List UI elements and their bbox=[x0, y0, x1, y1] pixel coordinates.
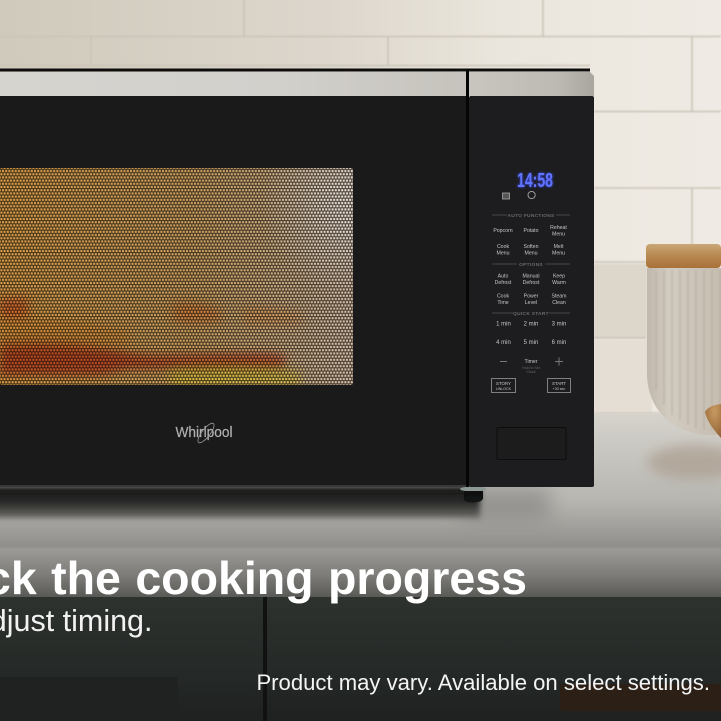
section: options: Defrost bbox=[495, 280, 512, 286]
timer controls: Clock bbox=[526, 370, 536, 374]
timer controls bbox=[500, 358, 563, 374]
section: options: Defrost bbox=[523, 280, 540, 286]
button: story unlock: UNLOCK bbox=[496, 387, 512, 391]
digital clock display: 14:58 bbox=[517, 169, 553, 192]
section: options: Auto bbox=[498, 274, 508, 280]
section: options: Steam bbox=[552, 294, 566, 300]
microwave shadow on counter bbox=[0, 486, 550, 518]
section: auto functions: Menu bbox=[497, 250, 510, 256]
section: quick start bbox=[492, 311, 570, 346]
section: auto functions: Reheat bbox=[550, 225, 567, 231]
section: auto functions: Popcorn bbox=[493, 228, 513, 234]
icon: sensor bbox=[502, 193, 510, 199]
section: quick start: 1 min bbox=[496, 322, 511, 328]
button: story unlock: STORY bbox=[496, 381, 511, 386]
cabinet below counter bbox=[0, 597, 721, 721]
digital clock display bbox=[517, 169, 553, 192]
button: story unlock bbox=[492, 378, 516, 392]
microwave foot bbox=[460, 486, 486, 502]
section: quick start: 5 min bbox=[524, 340, 538, 346]
countertop bbox=[0, 414, 721, 598]
storage jar bbox=[646, 244, 721, 435]
section: options: Cook bbox=[497, 294, 509, 300]
section: auto functions bbox=[492, 213, 570, 256]
door window with food visible bbox=[0, 168, 353, 386]
icon: timer bbox=[528, 191, 535, 199]
steel top trim: door bbox=[0, 72, 466, 96]
button: start bbox=[548, 378, 570, 392]
timer controls: Timer bbox=[524, 359, 538, 365]
section: options bbox=[492, 262, 570, 306]
section: auto functions: Potato bbox=[524, 228, 539, 234]
button: start: START bbox=[552, 381, 566, 386]
section: options: Manual bbox=[522, 274, 540, 280]
button: start: +30 sec bbox=[553, 387, 566, 391]
timer controls: Hold to Set bbox=[522, 366, 540, 370]
section: options: Power bbox=[524, 294, 539, 300]
section: options: Warm bbox=[552, 280, 566, 286]
section: auto functions: Menu bbox=[525, 250, 538, 256]
section: quick start: 3 min bbox=[552, 322, 566, 328]
section: quick start: 4 min bbox=[496, 340, 511, 346]
tiled wall bbox=[0, 0, 721, 430]
section: quick start: QUICK START bbox=[513, 311, 549, 317]
section: auto functions: Soften bbox=[524, 244, 539, 250]
section: options: OPTIONS bbox=[519, 262, 543, 268]
section: auto functions: Menu bbox=[552, 250, 565, 256]
section: quick start: 6 min bbox=[552, 340, 566, 346]
section: options: Time bbox=[497, 300, 509, 306]
steel top trim: panel bbox=[469, 72, 594, 96]
section: options: Keep bbox=[553, 274, 565, 280]
digital clock display: 14:58 bbox=[517, 169, 553, 192]
disclaimer: Product may vary. Available on select settings. bbox=[256, 670, 710, 695]
brand logo bbox=[176, 421, 232, 445]
microwave body bbox=[0, 68, 594, 487]
section: auto functions: AUTO FUNCTIONS bbox=[507, 213, 555, 219]
section: auto functions: Menu bbox=[552, 232, 565, 238]
section: auto functions: Melt bbox=[554, 244, 564, 250]
section: quick start: 2 min bbox=[524, 322, 538, 328]
section: options: Level bbox=[525, 300, 537, 306]
brand logo: Whirlpool bbox=[176, 425, 232, 441]
section: options: Clean bbox=[552, 300, 566, 306]
section: auto functions: Cook bbox=[497, 244, 509, 250]
panel recess bbox=[497, 428, 566, 460]
wooden bowl bbox=[705, 404, 721, 438]
control panel bbox=[492, 169, 570, 460]
